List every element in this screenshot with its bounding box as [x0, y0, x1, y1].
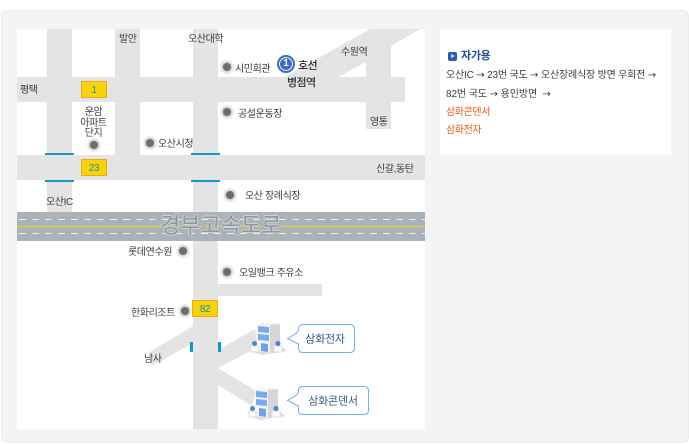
icon: building 삼화콘덴서 — [248, 387, 285, 420]
text: 공설운동장 — [238, 109, 282, 120]
text: 오산시청 — [158, 139, 193, 150]
heading: 자가용 — [461, 50, 490, 62]
icon: line 1 — [277, 55, 295, 73]
place: 오산시청 — [146, 139, 154, 147]
road badge: 23 — [81, 159, 107, 176]
place: 운암아파트단지: 아파트 — [80, 118, 107, 128]
text: 롯데연수원 — [128, 247, 172, 258]
station name: 호선 — [298, 60, 317, 72]
text: 한화리조트 — [131, 308, 175, 319]
icon: play bullet — [448, 52, 457, 61]
callout: 삼화콘덴서 — [286, 386, 369, 415]
destination 2: 삼화전자 — [446, 125, 481, 136]
subway station — [277, 55, 317, 89]
road badge: 82 — [192, 300, 218, 317]
panel: directions — [440, 29, 671, 155]
text: 시민회관 — [235, 64, 270, 75]
place: 공설운동장 — [223, 108, 231, 116]
icon: line 1: 1 — [283, 58, 289, 69]
place: 한화리조트 — [181, 307, 189, 315]
place: 운암아파트단지: 단지 — [85, 128, 102, 139]
icon: building 삼화전자 — [250, 322, 287, 355]
panel: map — [17, 29, 425, 429]
road badge: 1: 1 — [91, 85, 97, 96]
callout: 삼화전자: 삼화전자 — [305, 332, 345, 346]
text: 수원역 — [341, 47, 367, 58]
station name: 병점역 — [287, 77, 316, 89]
text: 오산대학 — [188, 34, 223, 45]
place: 롯데연수원 — [179, 247, 187, 255]
text: 오일뱅크 주유소 — [239, 268, 303, 279]
text: 오산IC — [46, 197, 73, 208]
place: 운암아파트단지: 운암 — [85, 107, 102, 118]
road badge: 1 — [81, 81, 107, 98]
highway — [17, 212, 425, 241]
highway name: 경부고속도로 — [160, 213, 281, 238]
callout: 삼화전자 — [286, 324, 355, 353]
road tick marks — [45, 153, 221, 352]
destination 1: 삼화콘덴서 — [446, 107, 490, 118]
text: 평택 — [20, 85, 38, 96]
place: 시민회관 — [223, 63, 231, 71]
road badge: 82: 82 — [200, 304, 210, 315]
text: 신갈,동탄 — [376, 164, 414, 175]
place: 운암아파트단지 — [80, 106, 107, 139]
callout: 삼화콘덴서: 삼화콘덴서 — [308, 394, 358, 408]
place: 오산 장례식장 — [226, 191, 234, 199]
station name — [287, 60, 317, 89]
text: 오산 장례식장 — [245, 191, 300, 202]
route line 1: 오산IC → 23번 국도 → 오산장례식장 방면 우회전 → — [446, 70, 656, 81]
road badge: 23: 23 — [89, 163, 99, 174]
place: 오일뱅크 주유소 — [223, 268, 231, 276]
text: 남사 — [144, 354, 162, 365]
route line 2: 82번 국도 → 용인방면 → — [446, 89, 551, 100]
labels: 발안 — [119, 34, 137, 45]
text: 영통 — [370, 117, 388, 128]
